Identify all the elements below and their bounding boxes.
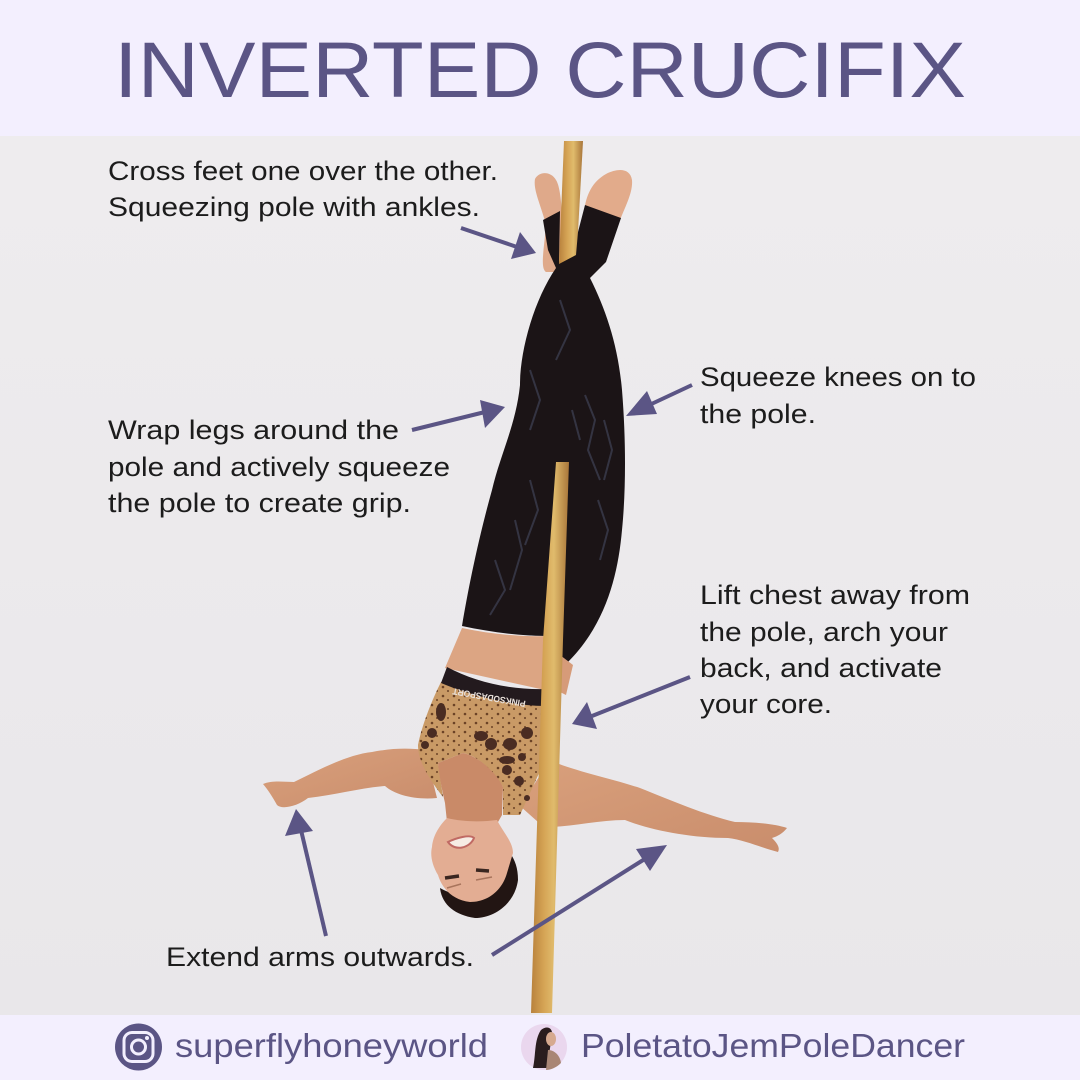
annotation: squeeze knees [700, 362, 976, 429]
sports top [418, 667, 546, 815]
annotation: lift chest: Lift chest away from [700, 580, 970, 610]
pole upper section [559, 141, 583, 264]
leggings sheen [490, 300, 612, 615]
annotation: lift chest [700, 580, 970, 719]
right arm [520, 760, 787, 852]
annotation: lift chest: back, and activate [700, 653, 942, 683]
annotation: extend arms: Extend arms outwards. [166, 942, 474, 972]
annotation: wrap legs: the pole to create grip. [108, 488, 411, 518]
arrow: to torso [572, 677, 690, 729]
feet [535, 170, 632, 272]
annotation: wrap legs [108, 415, 450, 518]
pole dancer figure [263, 141, 787, 1013]
avatar [521, 1024, 567, 1070]
top waistband [441, 667, 546, 709]
annotation: lift chest: the pole, arch your [700, 617, 948, 647]
midriff [445, 628, 548, 690]
arrow: to knees [626, 385, 692, 416]
pole lower section [531, 462, 569, 1013]
instagram handle: superflyhoneyworld [175, 1027, 488, 1064]
arrow: to legs [412, 400, 505, 430]
annotation: feet: Cross feet one over the other. [108, 156, 498, 186]
footer band [0, 1015, 1080, 1080]
arrow: to ankles [461, 228, 536, 259]
title band [0, 0, 1080, 136]
left arm [263, 749, 437, 807]
leggings [462, 205, 625, 664]
facebook handle: PoletatoJemPoleDancer [581, 1027, 965, 1064]
top waistband: PINKSODASPORT [451, 686, 526, 709]
title: INVERTED CRUCIFIX [114, 25, 966, 114]
annotation: wrap legs: Wrap legs around the [108, 415, 399, 445]
annotation: squeeze knees: Squeeze knees on to [700, 362, 976, 392]
icon: instagram [115, 1024, 162, 1070]
annotation: feet: Squeezing pole with ankles. [108, 192, 480, 222]
annotation: squeeze knees: the pole. [700, 399, 816, 429]
annotation: feet [108, 156, 498, 222]
neck and chest [438, 753, 503, 822]
eyes [445, 870, 489, 878]
annotation: wrap legs: pole and actively squeeze [108, 452, 450, 482]
smile [448, 836, 474, 848]
arrow: to left hand [285, 809, 326, 936]
right side waist [556, 655, 573, 695]
arrow: to right arm [492, 845, 667, 955]
hair [440, 853, 518, 918]
head [431, 818, 513, 902]
annotation: lift chest: your core. [700, 689, 832, 719]
